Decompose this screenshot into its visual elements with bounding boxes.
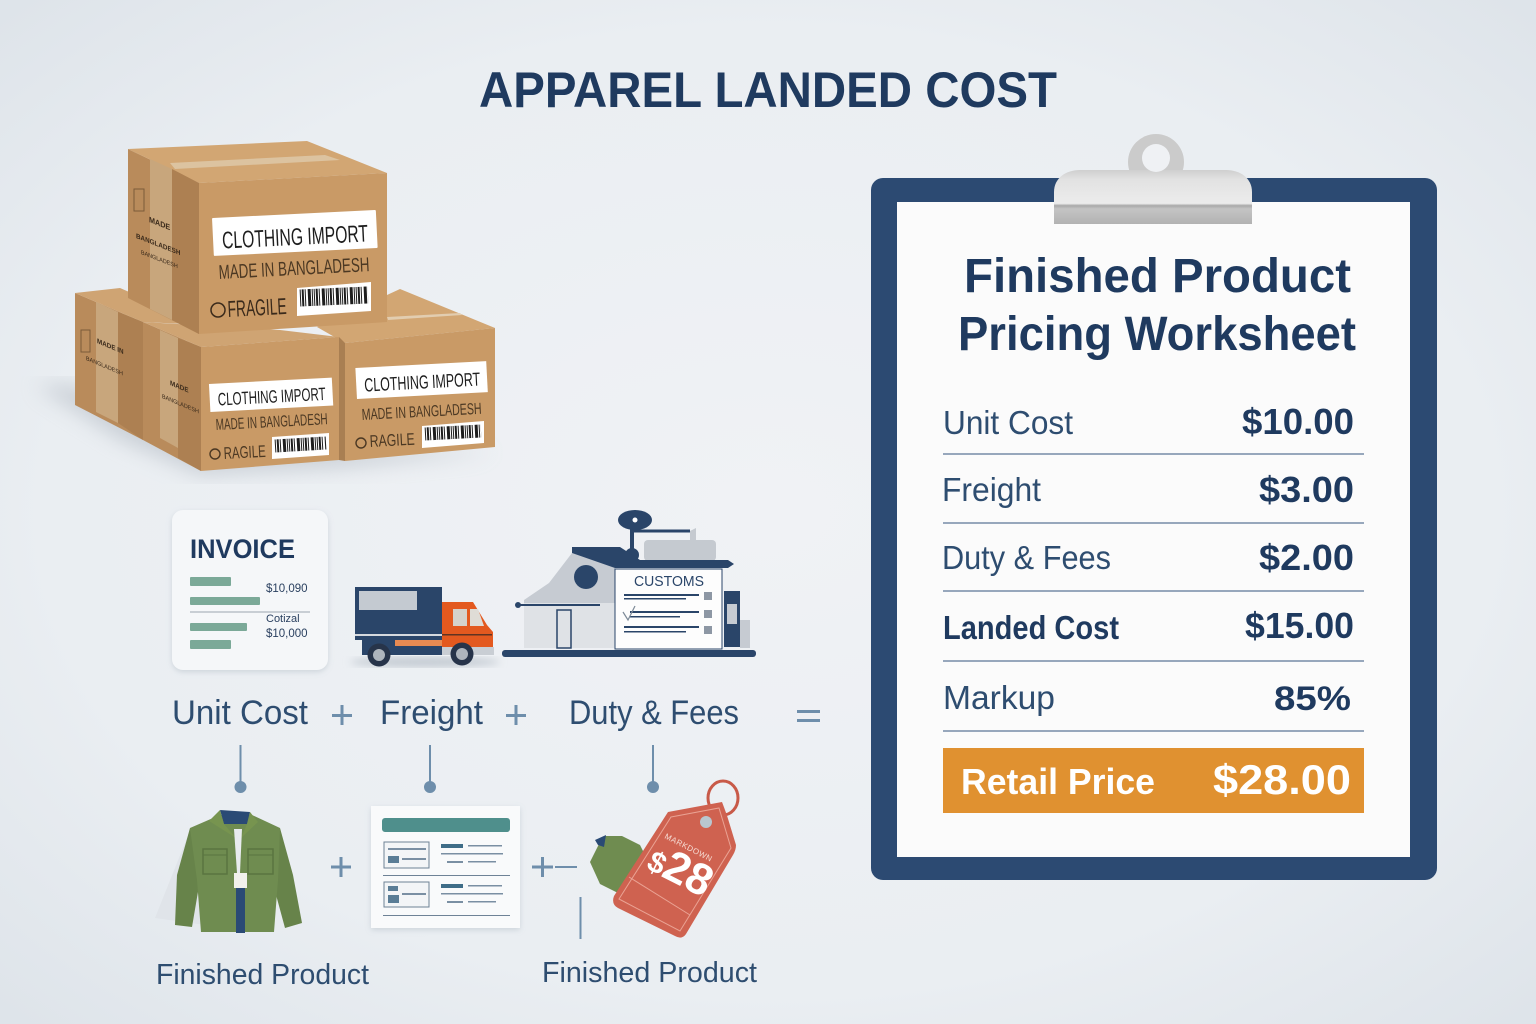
box: top: MADE IN BANGLADESH bbox=[218, 254, 370, 284]
icon: price tag with jacket: MARKDOWN bbox=[663, 832, 714, 863]
formula labels bbox=[172, 694, 739, 732]
row: unit cost: Unit Cost bbox=[943, 404, 1073, 441]
icon: customs building bbox=[502, 510, 756, 657]
row: duty and fees: $2.00 bbox=[1259, 537, 1354, 578]
icon: price tag with jacket bbox=[590, 781, 738, 938]
worksheet heading: Pricing Worksheet bbox=[958, 308, 1356, 361]
icon: invoice card: Cotizal bbox=[266, 613, 300, 625]
box: top: FRAGILE bbox=[227, 293, 287, 322]
label: clothing import: CLOTHING IMPORT bbox=[217, 384, 326, 410]
plus and dash connector bbox=[532, 857, 582, 939]
row: unit cost bbox=[943, 401, 1354, 442]
label: clothing import: CLOTHING IMPORT bbox=[364, 370, 481, 397]
row: landed cost bbox=[943, 605, 1354, 646]
label: clothing import bbox=[209, 378, 333, 412]
row: retail price: $28.00 bbox=[1213, 756, 1351, 803]
icon: invoice card: $10,000 bbox=[266, 628, 308, 640]
row: freight: $3.00 bbox=[1259, 469, 1354, 510]
illustration: stacked cardboard boxes bbox=[35, 141, 495, 475]
box: bottom right: RAGILE bbox=[369, 430, 415, 451]
box: bottom centre: BANGLADESH bbox=[162, 394, 199, 416]
icon: invoice card bbox=[172, 510, 328, 670]
row: freight bbox=[942, 469, 1354, 510]
box: bottom centre: RAGILE bbox=[223, 442, 266, 463]
customs document: CUSTOMS bbox=[634, 573, 704, 590]
icon: price tag with jacket: $28 bbox=[640, 833, 721, 907]
box: bottom centre: MADE bbox=[170, 380, 189, 395]
box: bottom left rear: MADE IN bbox=[97, 338, 124, 356]
row: freight: Freight bbox=[942, 471, 1041, 508]
box: bottom centre bbox=[143, 322, 339, 471]
row: landed cost: $15.00 bbox=[1245, 605, 1354, 646]
row: landed cost: Landed Cost bbox=[943, 609, 1119, 646]
icon: delivery truck bbox=[350, 587, 500, 667]
row: markup bbox=[943, 679, 1351, 718]
clipboard clip bbox=[1054, 134, 1252, 224]
hang tag bbox=[234, 873, 247, 888]
box: bottom right: MADE IN BANGLADESH bbox=[361, 401, 482, 424]
label: clothing import bbox=[355, 361, 488, 399]
label: clothing import: CLOTHING IMPORT bbox=[221, 220, 369, 255]
worksheet heading: Finished Product bbox=[964, 250, 1351, 303]
jacket sleeves bbox=[175, 828, 302, 928]
row: duty and fees: Duty & Fees bbox=[942, 539, 1111, 576]
icon: worksheet document bbox=[371, 806, 520, 928]
plus and equals operators bbox=[332, 705, 820, 725]
row: unit cost: $10.00 bbox=[1242, 401, 1354, 442]
box: bottom right bbox=[317, 289, 495, 461]
caption: finished product right: Finished Product bbox=[542, 957, 757, 989]
label: clothing import bbox=[212, 210, 378, 256]
worksheet heading bbox=[958, 250, 1356, 361]
row: markup: Markup bbox=[943, 679, 1055, 716]
box: bottom centre: MADE IN BANGLADESH bbox=[215, 411, 328, 434]
box: top: BANGLADESH bbox=[136, 233, 180, 257]
box: top: MADE bbox=[149, 215, 170, 232]
customs document bbox=[615, 569, 722, 649]
box: top: BANGLADESH bbox=[141, 250, 178, 270]
invoice heading: INVOICE bbox=[190, 534, 295, 564]
caption: finished product left: Finished Product bbox=[156, 959, 369, 991]
plus operator bbox=[331, 857, 351, 877]
formula labels: Freight bbox=[380, 694, 484, 732]
formula labels: Duty & Fees bbox=[569, 694, 739, 732]
row: markup: 85% bbox=[1274, 680, 1351, 718]
arrows down bbox=[234, 745, 659, 793]
box: bottom left rear: BANGLADESH bbox=[86, 356, 123, 378]
box: bottom left rear bbox=[75, 288, 205, 440]
panel: pricing worksheet clipboard bbox=[871, 134, 1437, 880]
row: duty and fees bbox=[942, 537, 1354, 578]
row: retail price bbox=[943, 748, 1364, 813]
title: APPAREL LANDED COST bbox=[479, 62, 1057, 118]
box: top bbox=[128, 141, 387, 334]
formula labels: Unit Cost bbox=[172, 694, 309, 732]
truck wheels bbox=[368, 642, 474, 666]
icon: green jacket bbox=[155, 810, 302, 933]
row: retail price: Retail Price bbox=[961, 761, 1155, 802]
icon: invoice card: $10,090 bbox=[266, 583, 308, 595]
